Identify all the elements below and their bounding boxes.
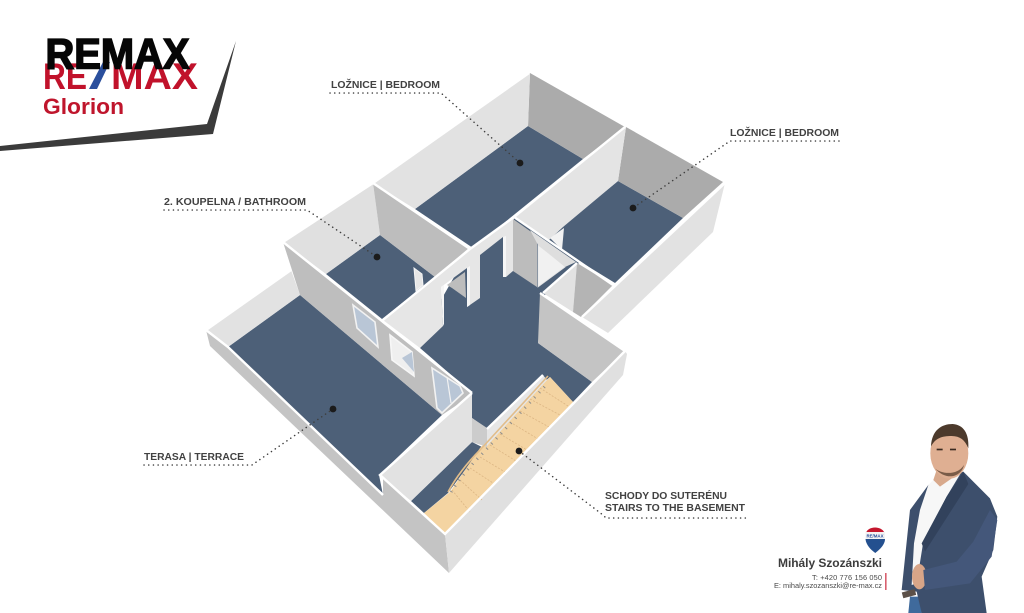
black REMAX wordmark: REMAX [46,30,190,78]
agent contact [774,556,887,590]
callout: bathroom [164,197,380,260]
neck [933,468,960,487]
stair partition wall [380,375,547,501]
callout: bedroom top [330,78,523,166]
closet walls [543,263,613,317]
leader bedroom top [330,93,520,163]
hall wall above stairs [538,293,625,382]
floor: terrace [228,295,442,495]
balloon band [866,532,885,539]
Glorion name: Glorion [43,94,124,119]
label bedroom top: LOŽNICE | BEDROOM [331,78,440,91]
jeans [908,597,922,613]
dot terrace [330,406,336,412]
stair handrail [448,376,548,492]
logo block [0,30,236,151]
white wall tops [206,73,725,534]
label stairs english: STAIRS TO THE BASEMENT [605,503,746,514]
window one [353,305,378,347]
hall right wall with door [513,219,576,287]
floor: hall [420,217,592,429]
floor: bedroom right [545,181,683,283]
logo slash shape [0,41,236,151]
label terrace: TERASA | TERRACE [144,452,244,463]
dot bathroom [374,254,380,260]
sleeve [923,510,997,590]
wooden staircase [424,377,573,533]
balloon bottom [866,539,885,553]
watch [902,589,916,598]
leader bedroom right [633,141,839,208]
face [930,428,968,479]
red RE/MAX wordmark: MAX [111,56,198,97]
exterior wall: stair room right side [445,351,627,573]
floor: bedroom top [415,126,583,248]
exterior wall: bedroom right side [582,183,725,333]
callout: stairs [516,448,746,518]
callout: bedroom right [630,126,839,211]
red accent bar [885,573,887,590]
dot stairs [516,448,522,454]
leader terrace [144,409,333,465]
eyes [937,449,956,450]
beard [935,465,964,476]
bathroom walls [283,183,469,291]
hand [912,564,927,589]
jacket [902,472,997,613]
agent portrait [902,424,997,613]
terrace door [432,368,463,413]
leader bathroom [164,210,377,257]
dot bedroom right [630,205,636,211]
terrace walls [206,242,472,415]
label stairs: SCHODY DO SUTERÉNU [605,489,727,502]
window two [390,335,414,376]
red RE/MAX wordmark [43,56,198,97]
lapel [922,472,968,552]
red RE/MAX wordmark: RE [43,56,87,97]
bedroom right walls [514,127,723,240]
RE/MAX balloon icon [866,528,885,553]
floor: stair room sliver [411,442,482,513]
bedroom top walls [373,73,625,209]
agent name: Mihály Szozánszki [778,556,882,570]
dot bedroom top [517,160,523,166]
hall wall with door openings [383,217,514,348]
balloon label: RE/MAX [866,534,884,539]
email: E: mihaly.szozanszki@re-max.cz [774,581,882,590]
exterior wall: left side [206,330,449,573]
shirt [912,470,963,585]
label bathroom: 2. KOUPELNA / BATHROOM [164,197,306,208]
balloon top [866,528,885,535]
floor: bathroom [326,235,435,319]
label bedroom right: LOŽNICE | BEDROOM [730,126,839,139]
leader stairs [519,451,746,518]
3D floor plan [206,73,725,573]
phone: T: +420 776 156 050 [812,573,882,582]
hair [931,424,968,448]
callout: terrace [144,406,336,465]
